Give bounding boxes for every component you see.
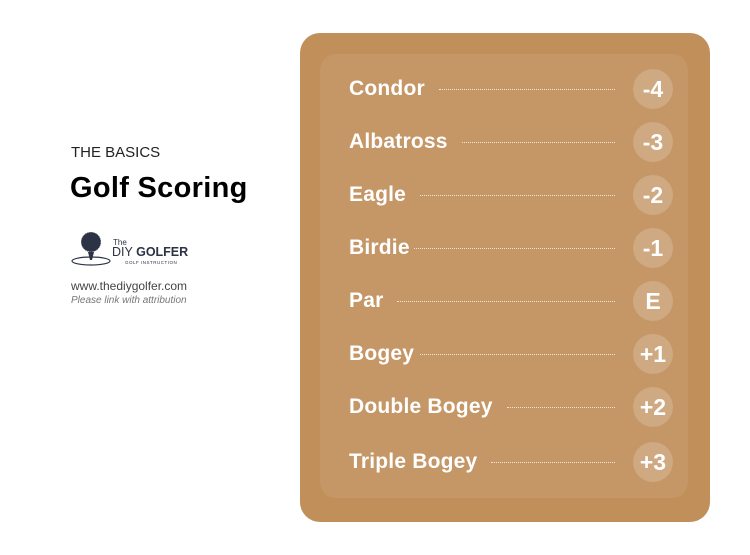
logo text: The <box>113 238 127 247</box>
title: Golf Scoring <box>70 172 248 204</box>
row: eagle: Eagle <box>349 183 406 206</box>
row: condor: Condor <box>349 77 425 100</box>
row: bogey: Bogey <box>349 342 414 365</box>
row: triple bogey <box>349 442 673 482</box>
row: double bogey: +2 <box>640 394 666 420</box>
row: birdie: Birdie <box>349 236 410 259</box>
subtitle: THE BASICS <box>71 144 160 161</box>
row: eagle <box>349 175 673 215</box>
logo: DIY GOLFER <box>112 245 188 259</box>
row: albatross: -3 <box>643 128 663 154</box>
inner panel <box>320 54 688 498</box>
logo: GOLF INSTRUCTION <box>125 260 177 265</box>
row: double bogey <box>349 387 673 427</box>
website: www.thediygolfer.com <box>71 279 187 293</box>
panel: scores <box>300 33 710 522</box>
row: double bogey: Double Bogey <box>349 395 493 418</box>
row: triple bogey: Triple Bogey <box>349 450 477 473</box>
attribution: Please link with attribution <box>71 295 187 306</box>
row: birdie <box>349 228 673 268</box>
row: par: Par <box>349 289 383 312</box>
row: albatross: Albatross <box>349 130 448 153</box>
row: bogey: +1 <box>640 340 666 366</box>
icon: golf ball on tee <box>71 232 111 266</box>
logo <box>71 232 188 266</box>
row: albatross <box>349 122 673 162</box>
row: par <box>349 281 673 321</box>
row: condor: -4 <box>643 76 663 102</box>
row: bogey <box>349 334 673 374</box>
row: birdie: -1 <box>643 234 663 260</box>
row: triple bogey: +3 <box>640 448 666 474</box>
row: eagle: -2 <box>643 182 663 208</box>
row: par: E <box>645 288 661 314</box>
row: condor <box>349 69 673 109</box>
